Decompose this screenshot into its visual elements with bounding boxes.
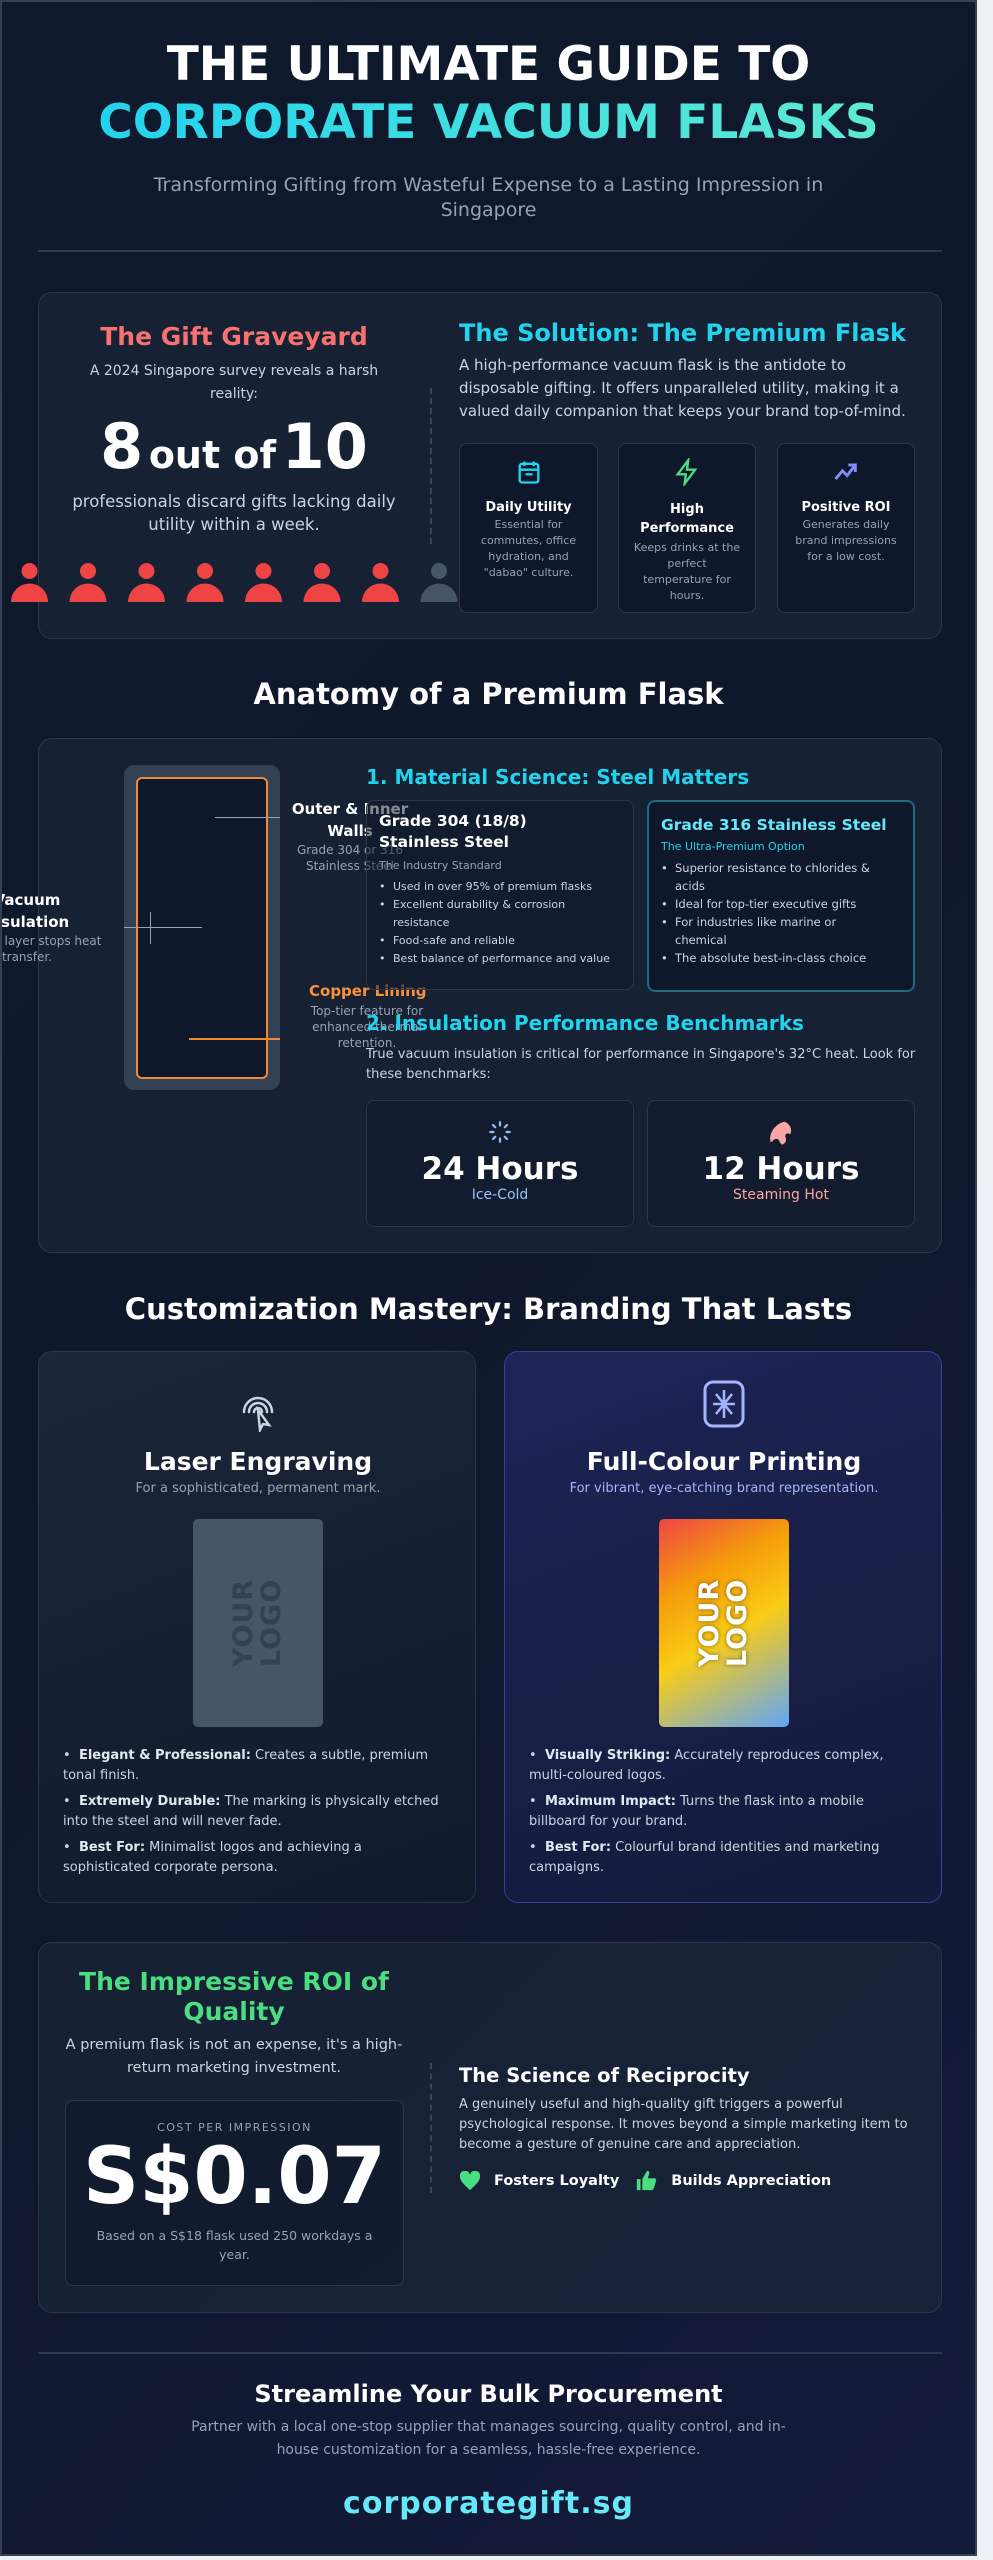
text: professionals discard: professionals discard gifts lacking daily utility within a week. — [72, 492, 396, 534]
card: grade 316: Superior resistance to chlorides & acids — [675, 861, 870, 893]
card: positive ROI — [777, 443, 915, 613]
card: grade 316: The absolute best-in-class choice — [675, 951, 866, 965]
panel: laser engraving — [38, 1351, 476, 1903]
logo mockup: colour: YOUR — [694, 1579, 725, 1667]
heading: customization: Customization Mastery: Branding That Lasts — [125, 1292, 852, 1326]
callout: cost per impression: Based on a S$18 flask used 250 workdays a year. — [97, 2228, 372, 2262]
list: laser benefits — [63, 1748, 439, 1875]
icon: printer — [704, 1380, 744, 1428]
list: laser benefits: • Best For: Minimalist logos and achieving a sophisticated corporate persona. — [63, 1840, 362, 1875]
card: grade 304: Best balance of performance and value — [393, 952, 610, 965]
list: printing benefits — [529, 1748, 883, 1875]
card: daily utility: Essential for commutes, office hydration, and "dabao" culture. — [481, 518, 576, 579]
badges: loyalty & appreciation: Builds Appreciation — [671, 2173, 831, 2189]
card: grade 316 — [647, 800, 915, 992]
brand: website: corporategift.sg — [343, 2486, 634, 2521]
list: printing benefits: • Visually Striking: Accurately reproduces complex, multi-coloured logos. — [529, 1748, 883, 1783]
card: high performance: High Performance — [640, 502, 734, 536]
card: 12 hours: Steaming Hot — [733, 1187, 829, 1203]
card: 24 hours: Ice-Cold — [472, 1187, 528, 1203]
badges: loyalty & appreciation: Fosters Loyalty — [494, 2173, 619, 2189]
label: walls — [292, 800, 408, 873]
list: printing benefits: • Maximum Impact: Turns the flask into a mobile billboard for your brand. — [529, 1794, 864, 1829]
text: procurement: Partner with a local one-stop supplier that manages sourcing, quality control, and in-house customization for a seamless, hassle-free experience. — [191, 2419, 786, 2458]
title — [98, 37, 879, 150]
diagram: flask — [124, 765, 280, 1090]
icon: fire — [770, 1122, 792, 1145]
heading: solution: The Solution: The Premium Flask — [459, 319, 906, 347]
title: laser: Laser Engraving — [144, 1447, 372, 1476]
list: printing benefits: • Best For: Colourful brand identities and marketing campaigns. — [529, 1840, 879, 1875]
card: grade 304: Excellent durability & corrosion resistance — [393, 898, 565, 929]
card: 12 hours — [647, 1100, 915, 1227]
icon: laser — [242, 1396, 274, 1432]
icon row: people — [11, 563, 458, 602]
card: grade 316: Grade 316 Stainless Steel — [661, 816, 887, 834]
card: positive ROI: Positive ROI — [801, 500, 891, 515]
card: daily utility — [459, 443, 598, 613]
heading: anatomy: Anatomy of a Premium Flask — [253, 677, 724, 711]
card: 24 hours — [366, 1100, 634, 1227]
logo mockup: colour — [659, 1519, 789, 1727]
text: insulation: True vacuum insulation is critical for performance in Singapore's 32°C heat. Look for these benchmarks: — [366, 1047, 915, 1082]
icon: bolt — [675, 458, 698, 486]
text: ROI: A premium flask is not an expense, it's a high-return marketing investment. — [66, 2037, 402, 2076]
callout: cost per impression: S$0.07 — [83, 2132, 386, 2222]
panel: anatomy — [38, 738, 942, 1253]
card: daily utility: Daily Utility — [485, 500, 572, 515]
icon: heart — [460, 2171, 480, 2190]
label: copper — [309, 982, 427, 1050]
title: CORPORATE VACUUM FLASKS — [98, 95, 879, 150]
label: walls: Outer & Inner Walls — [292, 800, 408, 840]
card: 12 hours: 12 Hours — [702, 1151, 859, 1187]
logo mockup: engraved — [193, 1519, 323, 1727]
subtitle: Transforming Gifting from Wasteful Expense to a Lasting Impression in Singapore — [154, 174, 823, 221]
list: laser benefits: • Elegant & Professional: Creates a subtle, premium tonal finish. — [63, 1748, 428, 1783]
title: THE ULTIMATE GUIDE TO — [167, 37, 810, 92]
text: solution: A high-performance vacuum flask is the antidote to disposable gifting. It offers unparalleled utility, making it a valued daily companion that keeps your brand top-of-mind. — [459, 356, 906, 420]
icon: calendar — [518, 462, 540, 484]
panel: full-colour printing: For vibrant, eye-catching brand representation. — [570, 1481, 878, 1496]
text: reciprocity: A genuinely useful and high-quality gift triggers a powerful psychological response. It moves beyond a simple marketing item to become a gesture of genuine care and appreciation. — [459, 2097, 908, 2152]
card: positive ROI: Generates daily brand impressions for a low cost. — [795, 518, 897, 563]
label: vacuum — [0, 891, 102, 964]
card: grade 304: Used in over 95% of premium flasks — [393, 880, 592, 893]
logo mockup: engraved: LOGO — [256, 1579, 287, 1667]
heading: ROI: The Impressive ROI of Quality — [79, 1967, 389, 2026]
card: grade 304: The Industry Standard — [379, 859, 502, 872]
icon: trend — [834, 464, 857, 480]
title: printing: Full-Colour Printing — [587, 1447, 861, 1476]
card: 24 hours: 24 Hours — [422, 1151, 578, 1187]
card: high performance — [618, 443, 756, 613]
heading: insulation: 2. Insulation Performance Benchmarks — [366, 1011, 804, 1035]
card: grade 316: For industries like marine or chemical — [675, 915, 836, 947]
logo mockup: engraved: YOUR — [228, 1579, 259, 1667]
stat: 8 out of 10: 8 out of 10 — [100, 410, 368, 483]
list: laser benefits: • Extremely Durable: The marking is physically etched into the steel and will never fade. — [63, 1794, 439, 1829]
heading: reciprocity: The Science of Reciprocity — [459, 2064, 750, 2087]
card: high performance: Keeps drinks at the perfect temperature for hours. — [634, 541, 740, 602]
callout: cost per impression: COST PER IMPRESSION — [157, 2121, 312, 2134]
heading: gift graveyard: The Gift Graveyard — [100, 322, 368, 351]
card: grade 304: Grade 304 (18/8) Stainless Steel — [379, 812, 527, 851]
label: walls: Grade 304 or 316 Stainless Steel — [297, 843, 403, 873]
panel: ROI — [38, 1942, 942, 2313]
card: grade 316: The Ultra-Premium Option — [661, 840, 805, 853]
text: survey: A 2024 Singapore survey reveals a harsh reality: — [90, 363, 378, 402]
logo mockup: colour: LOGO — [722, 1579, 753, 1667]
label: copper: Copper Lining — [309, 982, 427, 1000]
panel: problem & solution — [38, 292, 942, 639]
icon: snow — [489, 1121, 511, 1143]
heading: procurement: Streamline Your Bulk Procurement — [254, 2380, 723, 2408]
card: grade 304 — [366, 800, 634, 990]
badges: loyalty & appreciation — [460, 2170, 831, 2190]
panel: laser engraving: For a sophisticated, permanent mark. — [136, 1481, 380, 1496]
panel: full-colour printing — [504, 1351, 942, 1903]
card: grade 304: Food-safe and reliable — [393, 934, 515, 947]
callout: cost per impression — [65, 2100, 404, 2286]
label: copper: Top-tier feature for enhanced thermal retention. — [311, 1004, 423, 1050]
heading: material science: 1. Material Science: Steel Matters — [366, 765, 749, 789]
card: grade 316: Ideal for top-tier executive gifts — [675, 897, 856, 911]
icon: thumbs up — [636, 2170, 656, 2190]
